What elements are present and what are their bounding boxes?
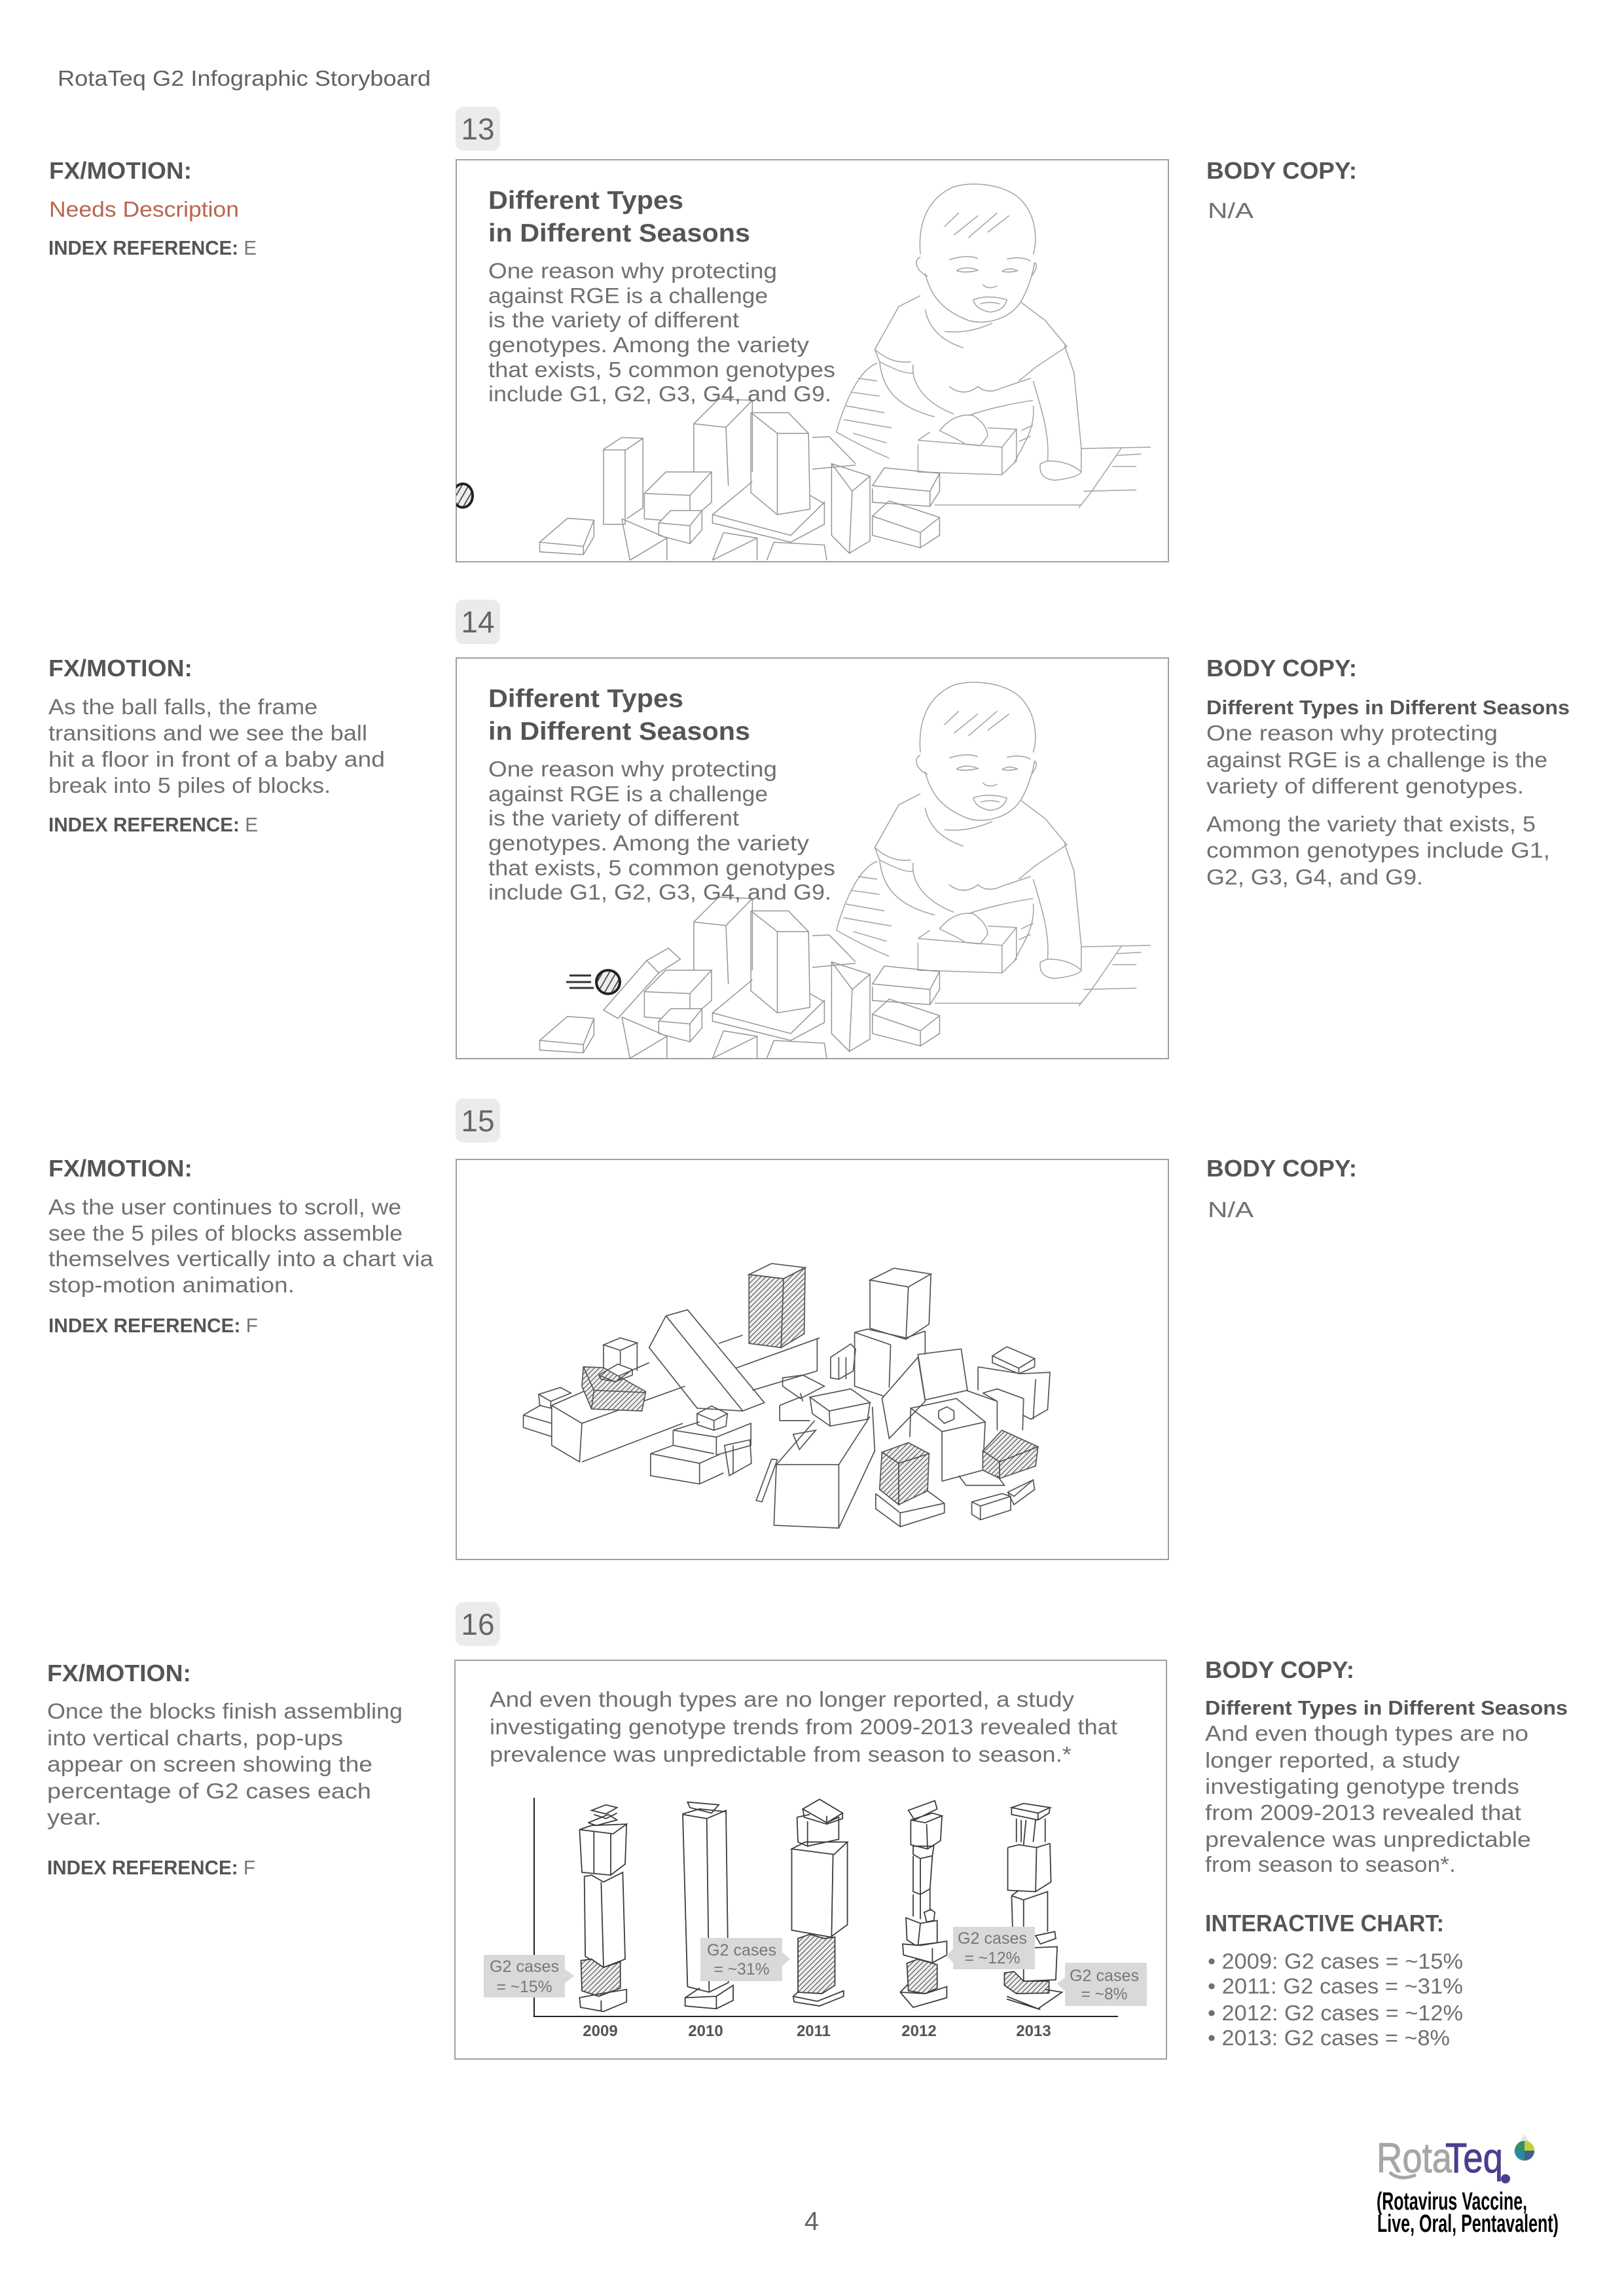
motion description: hit a floor in front of a baby and [48, 747, 385, 771]
panel heading [488, 685, 750, 746]
left notes 13 [48, 157, 257, 259]
interactive chart bullet list: • 2011: G2 cases = ~31% [1208, 1974, 1463, 1998]
storyboard row 15 [48, 1099, 1357, 1559]
panel body text: that exists, 5 common genotypes [488, 856, 835, 880]
motion description [48, 695, 385, 797]
callout: 2011: G2 cases [707, 1941, 776, 1959]
chart axes [534, 1798, 1118, 2016]
year labels: 2013 [1016, 2022, 1051, 2040]
body copy text: variety of different genotypes. [1206, 774, 1524, 798]
body copy text: from 2009-2013 revealed that [1205, 1800, 1521, 1825]
heading: body copy: BODY COPY: [1206, 1155, 1357, 1182]
body copy text: And even though types are no [1205, 1721, 1528, 1745]
callout: 2012: = ~12% [965, 1949, 1020, 1967]
heading: body copy: BODY COPY: [1205, 1656, 1354, 1683]
callout: 2013: = ~8% [1081, 1985, 1127, 2003]
block tower 2012 [900, 1800, 947, 2007]
panel body text: is the variety of different [488, 806, 739, 830]
block tower 2013 [1004, 1804, 1062, 2009]
panel intro text: investigating genotype trends from 2009-2013 revealed that [490, 1715, 1117, 1739]
interactive chart bullet list [1208, 1949, 1463, 2050]
callout: 2013: G2 cases [1070, 1967, 1139, 1985]
baby with blocks sketch [539, 682, 1151, 1059]
logo wordmark: Rota [1377, 2134, 1452, 2181]
motion description: percentage of G2 cases each [47, 1779, 371, 1803]
motion description: into vertical charts, pop-ups [47, 1726, 343, 1750]
product descriptor: (Rotavirus Vaccine, [1377, 2188, 1527, 2215]
frame number tab 14: 14 [461, 605, 495, 639]
year labels: 2009 [583, 2022, 618, 2040]
body copy text [1205, 1721, 1531, 1876]
body copy text: from season to season*. [1205, 1852, 1456, 1876]
body copy text: N/A [1208, 198, 1254, 223]
body copy text: prevalence was unpredictable [1205, 1827, 1531, 1851]
heading: body copy: BODY COPY: [1206, 655, 1357, 682]
frame number tab 13: 13 [461, 112, 495, 146]
motion description: themselves vertically into a chart via [48, 1247, 434, 1271]
heading: body copy: BODY COPY: [1206, 157, 1357, 184]
copy subheading: Different Types in Different Seasons [1205, 1696, 1568, 1719]
year labels [583, 2022, 1051, 2040]
right copy 14 [1206, 655, 1570, 889]
heading: interactive chart: INTERACTIVE CHART: [1205, 1910, 1444, 1937]
motion description: Once the blocks finish assembling [47, 1699, 403, 1723]
logo wordmark [1377, 2134, 1510, 2183]
callout: 2009 [484, 1955, 574, 1997]
panel body text: include G1, G2, G3, G4, and G9. [488, 880, 831, 904]
logo wordmark: Teq [1445, 2134, 1503, 2181]
panel 14 frame [456, 658, 1168, 1059]
left notes 16 [47, 1660, 403, 1879]
motion description: stop-motion animation. [48, 1273, 295, 1297]
index reference: INDEX REFERENCE: F [48, 1314, 258, 1337]
left notes 15 [48, 1155, 434, 1337]
callout: 2012 [947, 1927, 1035, 1969]
storyboard row 13 [48, 107, 1357, 562]
page number: 4 [804, 2207, 819, 2236]
heading: fx/motion: FX/MOTION: [48, 1155, 192, 1182]
panel body text: include G1, G2, G3, G4, and G9. [488, 382, 831, 406]
panel 15 frame [456, 1159, 1168, 1559]
panel 16 frame [455, 1660, 1166, 2059]
frame number tab 15 [456, 1099, 500, 1142]
body copy text: longer reported, a study [1205, 1748, 1460, 1772]
right copy 16 [1205, 1656, 1568, 2050]
callout: 2012: G2 cases [958, 1929, 1027, 1948]
block tower 2010 [683, 1802, 733, 2009]
storyboard row 16 [47, 1602, 1568, 2059]
year labels: 2010 [688, 2022, 723, 2040]
body copy text: N/A [1208, 1197, 1254, 1222]
body copy text: against RGE is a challenge is the [1206, 748, 1547, 772]
panel heading: Different Types [488, 187, 683, 215]
motion description [47, 1699, 403, 1829]
body copy text [1206, 721, 1550, 889]
frame number tab 14 [456, 600, 500, 644]
heading: fx/motion: FX/MOTION: [47, 1660, 191, 1686]
motion description: see the 5 piles of blocks assemble [48, 1221, 403, 1245]
callout: 2013 [1057, 1963, 1147, 2006]
motion description: transitions and we see the ball [48, 721, 367, 745]
interactive chart bullet list: • 2012: G2 cases = ~12% [1208, 2001, 1463, 2025]
heading: fx/motion: FX/MOTION: [49, 157, 192, 184]
icon: ball entering frame [453, 484, 473, 507]
heading: fx/motion: FX/MOTION: [48, 655, 192, 682]
motion description: appear on screen showing the [47, 1752, 372, 1776]
block tower 2009 [579, 1805, 626, 2011]
panel body text: genotypes. Among the variety [488, 831, 810, 855]
frame number tab 16 [456, 1602, 500, 1646]
body copy text: common genotypes include G1, [1206, 838, 1550, 862]
panel body text: that exists, 5 common genotypes [488, 357, 835, 382]
panel intro text [490, 1687, 1117, 1766]
storyboard row 14 [48, 600, 1570, 1059]
year labels: 2011 [797, 2022, 831, 2040]
callout: 2011 [700, 1938, 790, 1981]
panel body text: One reason why protecting [488, 757, 777, 781]
frame number tab 15: 15 [461, 1104, 495, 1138]
callout: 2009: G2 cases [490, 1958, 559, 1976]
interactive chart bullet list: • 2009: G2 cases = ~15% [1208, 1949, 1463, 1973]
motion description: break into 5 piles of blocks. [48, 773, 331, 797]
panel intro text: prevalence was unpredictable from season to season.* [490, 1742, 1072, 1766]
body copy text: investigating genotype trends [1205, 1774, 1519, 1798]
icon: moving ball with speed lines [566, 970, 620, 994]
panel heading: in Different Seasons [488, 219, 750, 247]
body copy text: Among the variety that exists, 5 [1206, 812, 1536, 836]
product descriptor [1377, 2188, 1559, 2238]
needs description note: Needs Description [49, 197, 239, 221]
panel heading [488, 187, 750, 247]
panel body text [488, 259, 835, 406]
index reference: INDEX REFERENCE: F [47, 1856, 255, 1879]
motion description: year. [47, 1805, 101, 1829]
body copy text: G2, G3, G4, and G9. [1206, 865, 1423, 889]
motion description: As the user continues to scroll, we [48, 1195, 401, 1219]
baby with blocks sketch [539, 184, 1151, 560]
document title: RotaTeq G2 Infographic Storyboard [58, 66, 431, 90]
panel body text: against RGE is a challenge [488, 782, 768, 806]
index reference: INDEX REFERENCE: E [48, 813, 258, 836]
panel heading: Different Types [488, 685, 683, 713]
motion description [48, 1195, 434, 1297]
panel heading: in Different Seasons [488, 718, 750, 746]
callout: 2009: = ~15% [496, 1978, 552, 1996]
copy subheading: Different Types in Different Seasons [1206, 696, 1570, 719]
callout: 2011: = ~31% [713, 1960, 770, 1978]
frame number tab 13 [456, 107, 500, 151]
year labels: 2012 [901, 2022, 937, 2040]
right copy 13 [1206, 157, 1357, 223]
scattered block piles sketch [524, 1264, 1050, 1528]
block tower 2011 [792, 1799, 848, 2006]
panel body text: genotypes. Among the variety [488, 333, 810, 357]
right copy 15 [1206, 1155, 1357, 1222]
body copy text: One reason why protecting [1206, 721, 1498, 745]
panel body text: is the variety of different [488, 308, 739, 332]
icon: multicolour drop [1514, 2134, 1535, 2161]
interactive chart bullet list: • 2013: G2 cases = ~8% [1208, 2026, 1450, 2050]
panel body text [488, 757, 835, 904]
RotaTeq logo [1377, 2134, 1559, 2238]
panel intro text: And even though types are no longer reported, a study [490, 1687, 1075, 1711]
motion description: As the ball falls, the frame [48, 695, 317, 719]
panel body text: against RGE is a challenge [488, 283, 768, 308]
frame number tab 16: 16 [461, 1607, 495, 1641]
index reference: INDEX REFERENCE: E [48, 236, 257, 259]
left notes 14 [48, 655, 385, 836]
panel 13 frame [453, 160, 1168, 562]
panel body text: One reason why protecting [488, 259, 777, 283]
